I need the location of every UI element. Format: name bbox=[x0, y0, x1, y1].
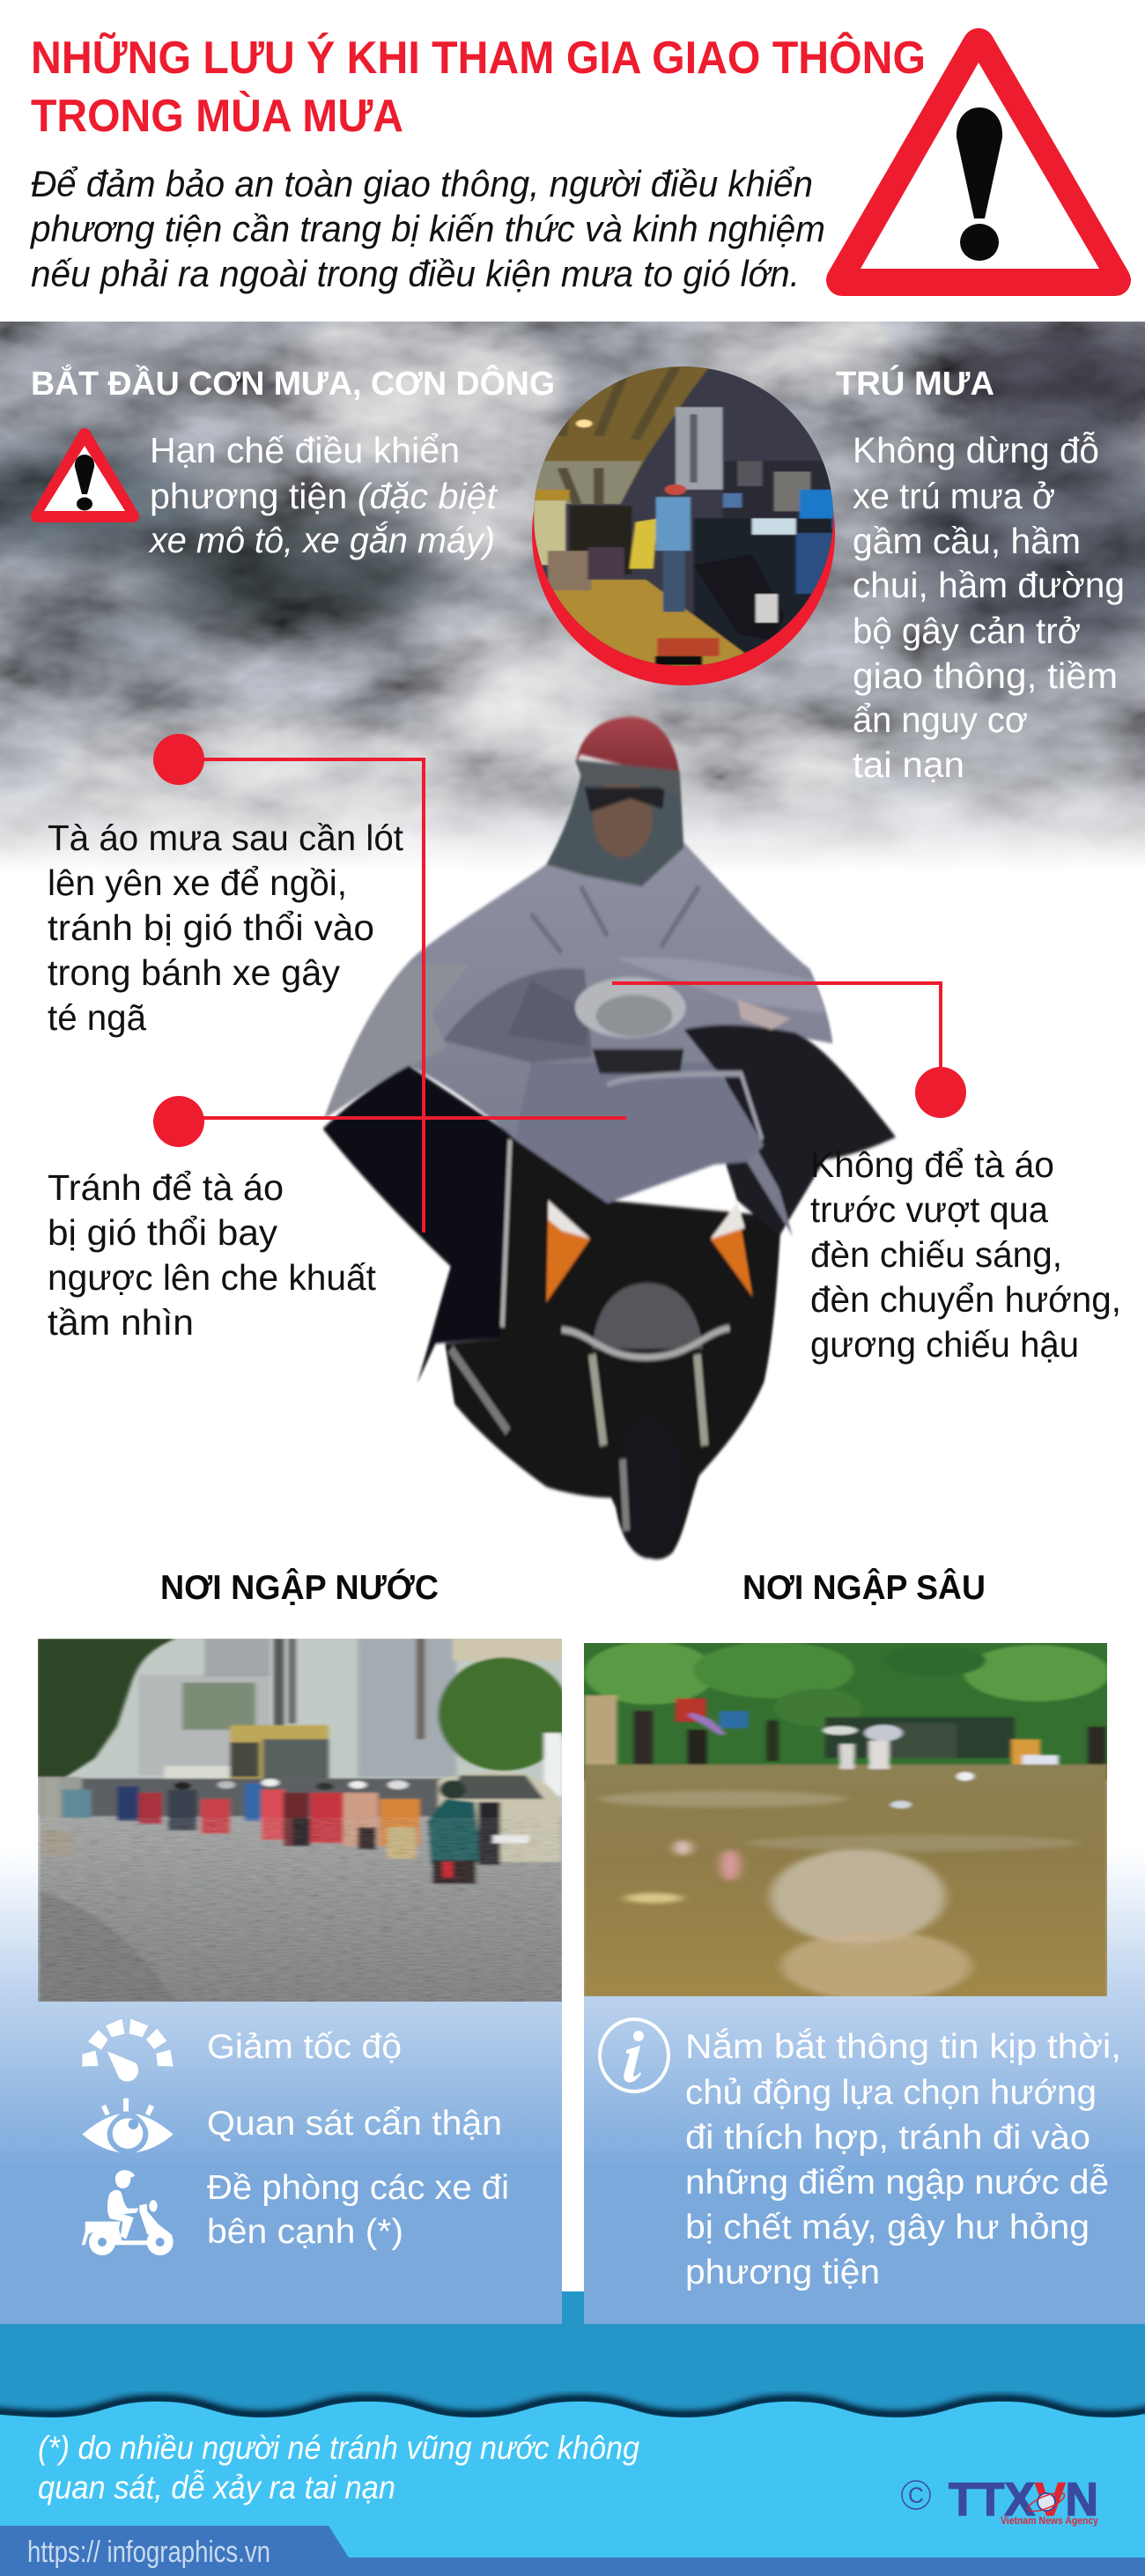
title bbox=[31, 32, 926, 142]
photo: deep flooded street bbox=[583, 1642, 1110, 2001]
panel: right blue bbox=[584, 1850, 1145, 2324]
dark fill behind right of raincoat bbox=[683, 1030, 896, 1236]
text: stay informed: đi thích hợp, tránh đi vào bbox=[685, 2119, 1090, 2157]
footer wave bbox=[0, 2402, 1145, 2576]
collar and hood bbox=[546, 776, 683, 886]
photo: people sheltering under an overpass bbox=[526, 360, 847, 685]
text: do not stop under bridges: xe trú mưa ở bbox=[853, 476, 1055, 516]
logo: Vietnam News Agency bbox=[1001, 2516, 1099, 2527]
text: front flap advice: đèn chuyển hướng, bbox=[810, 1279, 1121, 1320]
right dark flap bbox=[683, 1025, 896, 1162]
front fairing bbox=[592, 1283, 703, 1349]
text: watch nearby vehicles: Đề phòng các xe đi bbox=[207, 2169, 509, 2207]
text: view advice: Tránh để tà áo bbox=[48, 1167, 284, 1208]
website url: https:// infographics.vn bbox=[27, 2535, 270, 2569]
face bbox=[593, 778, 653, 857]
text: front flap advice bbox=[810, 1144, 1121, 1365]
text: do not stop under bridges: chui, hầm đường bbox=[853, 565, 1125, 605]
logo: TTXVN bbox=[949, 2474, 1098, 2526]
panel: left blue bbox=[0, 1850, 562, 2324]
text: do not stop under bridges: giao thông, tiềm bbox=[853, 655, 1118, 696]
text: observe carefully: Quan sát cẩn thận bbox=[207, 2105, 502, 2143]
footnote: quan sát, dễ xảy ra tai nạn bbox=[38, 2469, 395, 2506]
heading: flooded area: NƠI NGẬP NƯỚC bbox=[160, 1568, 439, 1607]
intro text: phương tiện cần trang bị kiến thức và kinh nghiệm bbox=[29, 208, 825, 249]
title: TRONG MÙA MƯA bbox=[31, 91, 403, 142]
text: stay informed: những điểm ngập nước dễ bbox=[685, 2164, 1109, 2202]
text: rear flap advice bbox=[48, 818, 404, 1038]
intro text: Để đảm bảo an toàn giao thông, người điều khiển bbox=[31, 163, 813, 204]
headlamp and windshield bbox=[575, 977, 686, 1038]
figure: rider in raincoat on scooter bbox=[323, 717, 896, 1559]
intro text bbox=[29, 163, 825, 294]
text: slow down: Giảm tốc độ bbox=[207, 2028, 402, 2066]
icon: small warning triangle bbox=[37, 434, 133, 516]
callout lines and dots bbox=[153, 734, 966, 1232]
front wheel bbox=[614, 1415, 684, 1558]
text: view advice: ngược lên che khuất bbox=[48, 1257, 377, 1298]
text: front flap advice: đèn chiếu sáng, bbox=[810, 1234, 1062, 1275]
text: front flap advice: trước vượt qua bbox=[810, 1189, 1048, 1230]
text: stay informed: Nắm bắt thông tin kịp thời, bbox=[685, 2028, 1121, 2066]
text: rear flap advice: lên yên xe để ngồi, bbox=[48, 862, 347, 903]
text: stay informed bbox=[685, 2028, 1121, 2291]
wave shadow bbox=[0, 2399, 1145, 2415]
footnote bbox=[38, 2430, 639, 2506]
footnote: (*) do nhiều người né tránh vũng nước không bbox=[38, 2430, 639, 2466]
photo: traffic on flooded street bbox=[36, 1639, 570, 2003]
text: stay informed: chủ động lựa chọn hướng bbox=[685, 2074, 1097, 2112]
text: watch nearby vehicles bbox=[207, 2169, 509, 2251]
text: stay informed: bị chết máy, gây hư hỏng bbox=[685, 2209, 1090, 2247]
text: do not stop under bridges: ẩn nguy cơ bbox=[853, 700, 1028, 740]
text: limit riding: Hạn chế điều khiển bbox=[150, 430, 460, 470]
text: do not stop under bridges bbox=[853, 430, 1125, 785]
helmet bbox=[576, 717, 680, 779]
heading: start of rain: BẮT ĐẦU CƠN MƯA, CƠN DÔNG bbox=[31, 363, 555, 403]
rear dark flap bbox=[323, 1065, 520, 1383]
text: view advice: tầm nhìn bbox=[48, 1302, 194, 1343]
turn signals bbox=[546, 1200, 590, 1302]
text: limit riding: xe mô tô, xe gắn máy) bbox=[148, 520, 495, 560]
text: do not stop under bridges: gầm cầu, hầm bbox=[853, 521, 1081, 561]
text: rear flap advice: trong bánh xe gây bbox=[48, 952, 340, 993]
raincoat bbox=[324, 842, 832, 1236]
icon: info bbox=[600, 2019, 669, 2091]
text: view advice: bị gió thổi bay bbox=[48, 1212, 278, 1253]
text: limit riding: phương tiện (đặc biệt bbox=[150, 476, 499, 516]
footer bar bbox=[0, 2526, 1145, 2576]
text: view advice bbox=[48, 1167, 377, 1343]
logo: C bbox=[908, 2483, 924, 2508]
text: do not stop under bridges: bộ gây cản trở bbox=[853, 611, 1081, 651]
text: watch nearby vehicles: bên cạnh (*) bbox=[207, 2213, 403, 2251]
text: front flap advice: Không để tà áo bbox=[810, 1144, 1054, 1185]
storm sky background bbox=[0, 317, 1145, 872]
text: rear flap advice: Tà áo mưa sau cần lót bbox=[48, 818, 404, 858]
intro text: nếu phải ra ngoài trong điều kiện mưa to gió lớn. bbox=[31, 253, 800, 294]
text: rear flap advice: té ngã bbox=[48, 997, 146, 1038]
text: do not stop under bridges: tai nạn bbox=[853, 744, 964, 785]
icon: speedometer bbox=[82, 2019, 174, 2082]
title: NHỮNG LƯU Ý KHI THAM GIA GIAO THÔNG bbox=[31, 32, 926, 84]
scooter body bbox=[445, 1135, 781, 1559]
text: limit riding bbox=[148, 430, 499, 560]
text: front flap advice: gương chiếu hậu bbox=[810, 1324, 1079, 1365]
icon: eye bbox=[82, 2099, 174, 2152]
text: do not stop under bridges: Không dừng đỗ bbox=[853, 430, 1099, 470]
icon: scooter rider bbox=[82, 2170, 174, 2255]
text: rear flap advice: tránh bị gió thổi vào bbox=[48, 907, 374, 948]
heading: sheltering: TRÚ MƯA bbox=[836, 364, 994, 403]
lower water band bbox=[0, 2291, 1145, 2576]
text: stay informed: phương tiện bbox=[685, 2254, 880, 2291]
heading: deep flooded area: NƠI NGẬP SÂU bbox=[742, 1568, 986, 1607]
icon: large warning triangle bbox=[842, 44, 1115, 280]
